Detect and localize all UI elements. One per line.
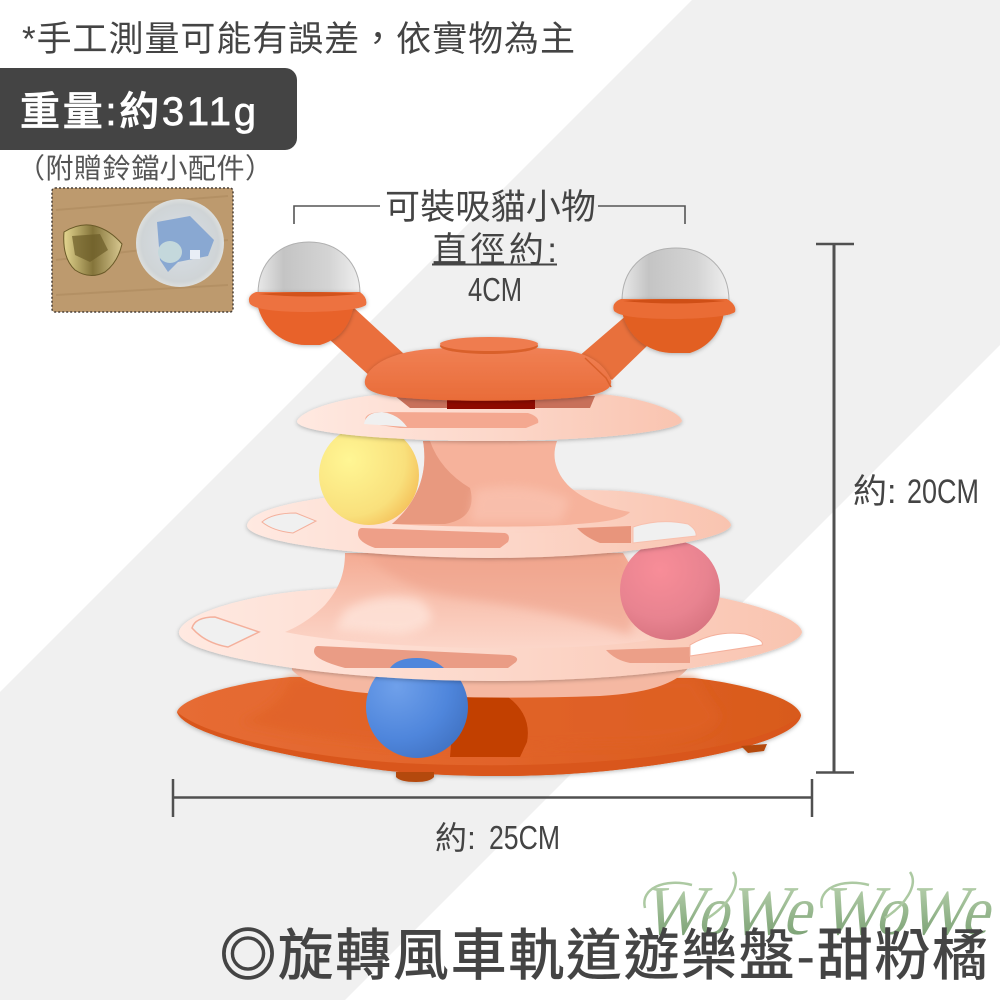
- bottom plate features: [192, 617, 762, 668]
- track plate: middle: [247, 490, 731, 558]
- toy illustration: [177, 242, 802, 782]
- label: diameter heading: 直徑約:: [432, 231, 557, 270]
- middle plate right slot: [577, 526, 631, 543]
- note: measurement disclaimer: *手工測量可能有誤差，依實物為主: [22, 20, 575, 59]
- cap button: [440, 337, 538, 354]
- label: height: 20CM: [907, 473, 979, 511]
- label: holder description: 可裝吸貓小物: [385, 188, 596, 227]
- watermark: WoWe: [638, 873, 825, 950]
- label: width: 25CM: [489, 819, 560, 856]
- middle plate right hole: [633, 522, 696, 543]
- icon: gold bell: [64, 225, 122, 276]
- track plate: bottom: [179, 584, 802, 681]
- label: width: [435, 819, 560, 856]
- label: height: 約:: [853, 473, 896, 511]
- middle plate slot: [358, 528, 509, 548]
- caption: free bell accessory: （附贈鈴鐺小配件）: [17, 153, 273, 184]
- weight badge: [0, 68, 297, 150]
- icon: clear LED ball: [136, 199, 224, 287]
- photo: bell and light ball: [52, 188, 233, 312]
- middle column: [285, 553, 650, 648]
- top plate hole: [364, 412, 407, 427]
- label: width: 約:: [435, 820, 476, 856]
- right dome: [622, 248, 729, 301]
- right arm: [578, 314, 648, 380]
- weight badge: 重量:約311g: [20, 90, 256, 134]
- upper column highlight: [470, 487, 570, 522]
- dimension: horizontal width bar: [173, 779, 812, 817]
- bottom plate slot: [314, 646, 517, 668]
- top cap: [365, 337, 611, 401]
- ball: pink: [620, 540, 720, 640]
- upper column: [392, 441, 630, 527]
- column shading: [365, 553, 640, 635]
- ball: blue: [366, 656, 468, 758]
- top plate slot: [365, 412, 538, 428]
- lower column: [292, 660, 688, 698]
- left dome: [258, 242, 360, 294]
- toy feet: [396, 744, 767, 782]
- dimension: vertical height bar: [816, 244, 854, 772]
- watermark: [638, 872, 1000, 950]
- bottom plate left handle hole: [192, 617, 259, 647]
- right cup: [613, 299, 735, 353]
- shadow under cap: [395, 396, 595, 409]
- bottom plate right hole: [690, 633, 762, 656]
- bottom plate right slot: [606, 647, 690, 663]
- label: height: [853, 473, 979, 511]
- column highlight: [335, 597, 431, 635]
- upper column dark shade: [392, 441, 472, 524]
- product title: ◎旋轉風車軌道遊樂盤-甜粉橘: [220, 924, 988, 987]
- blue ball through slot: [390, 658, 444, 668]
- bracket above cups: [294, 206, 685, 224]
- middle plate left hole: [262, 513, 316, 533]
- left cup: [249, 292, 366, 345]
- track plate: top: [297, 391, 682, 441]
- toy base: [177, 677, 801, 782]
- ball: yellow: [319, 425, 419, 525]
- label: diameter value: 4CM: [468, 271, 522, 308]
- left arm: [330, 306, 404, 378]
